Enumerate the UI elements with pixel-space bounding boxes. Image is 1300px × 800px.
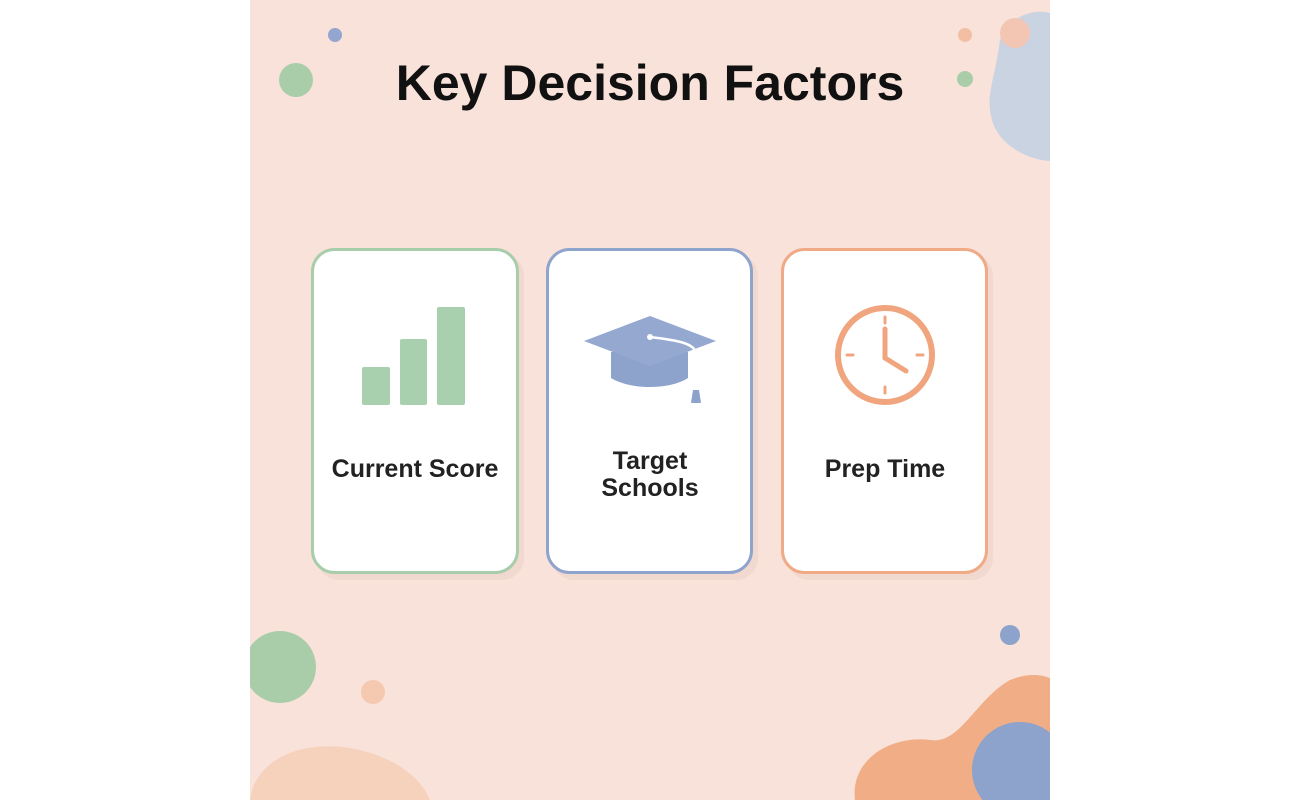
label: target schools: Target (613, 447, 688, 475)
card: prep time (782, 250, 993, 580)
label: prep time: Prep Time (825, 455, 945, 483)
title: Key Decision Factors (396, 55, 904, 111)
decoration: top-left dots (279, 28, 342, 97)
decoration: bottom-right shapes (855, 625, 1068, 800)
decoration: top-right blob and dots (957, 12, 1060, 161)
card: target schools (548, 250, 758, 580)
card: target schools: Schools (601, 474, 699, 502)
label: current score: Current Score (332, 455, 498, 483)
icon: clock (838, 308, 932, 402)
card: current score (312, 250, 524, 580)
infographic canvas (250, 0, 1050, 800)
icon: graduation cap (584, 316, 716, 403)
icon: bar chart (362, 307, 465, 405)
decoration: bottom-left shapes (244, 631, 430, 800)
